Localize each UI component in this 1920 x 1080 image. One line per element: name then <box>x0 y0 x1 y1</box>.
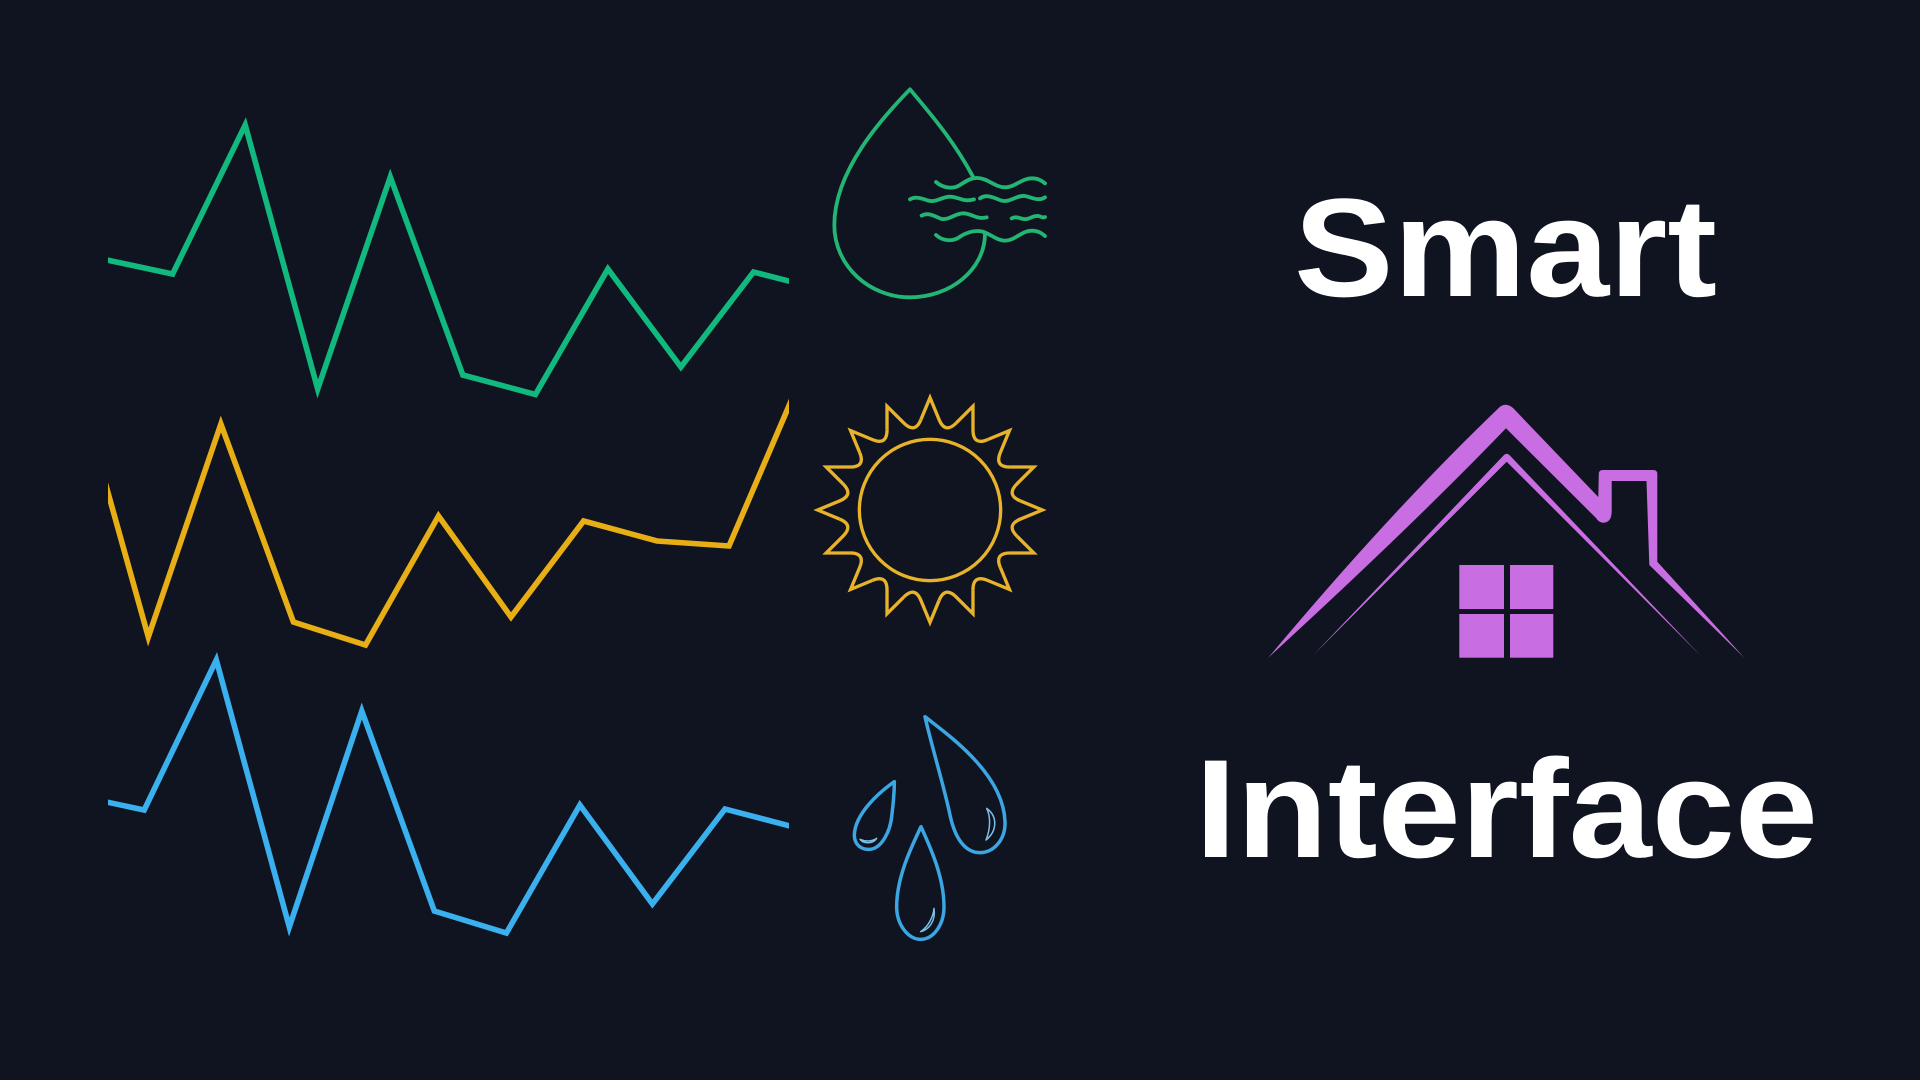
infographic canvas <box>108 87 1813 942</box>
sun disc <box>859 439 1001 581</box>
inner roof line <box>1313 454 1701 656</box>
line chart: blue rain trend <box>100 660 800 933</box>
icon: sun <box>816 396 1044 624</box>
line chart: yellow sunlight trend <box>100 380 800 645</box>
heading: Smart: Smart <box>1294 169 1717 326</box>
icon: water drop with waves <box>834 89 1045 297</box>
waves <box>910 178 1045 241</box>
window <box>1459 565 1553 658</box>
roof and chimney <box>1268 405 1744 658</box>
water drop outline <box>834 89 985 297</box>
sun rays <box>816 396 1044 624</box>
small left drop <box>854 782 894 849</box>
heading: Interface: Interface <box>1195 730 1818 887</box>
icon: rain drops <box>854 717 1005 939</box>
panel: sensor line charts <box>100 125 800 933</box>
middle drop <box>897 827 944 939</box>
icon: house logo <box>1268 405 1744 658</box>
large drop <box>925 717 1005 853</box>
line chart: green water trend <box>100 125 800 394</box>
